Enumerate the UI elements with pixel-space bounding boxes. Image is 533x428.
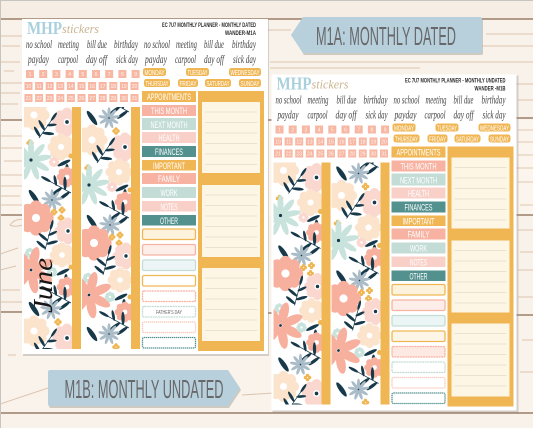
date stickers: 9 — [384, 128, 387, 134]
weekday stickers: THURSDAY — [395, 136, 418, 144]
script word stickers: day off — [454, 110, 475, 122]
date stickers: 30 — [121, 96, 127, 102]
panel: sticker sheet M1B undated — [251, 74, 518, 416]
date stickers: 1 — [278, 128, 281, 134]
date stickers: 10 — [26, 84, 31, 90]
weekday stickers: WEDNESDAY — [230, 70, 260, 77]
script word stickers: no school — [26, 39, 52, 51]
category labels: WORK — [160, 188, 178, 199]
category labels: IMPORTANT — [153, 161, 185, 172]
sheet title: EC 7U7 MONTHLY PLANNER - MONTHLY DATED — [162, 23, 256, 29]
script word stickers: carpool — [175, 54, 196, 66]
script word stickers: no school — [276, 94, 302, 106]
date stickers: 2 — [42, 72, 45, 78]
date stickers — [24, 70, 140, 102]
category labels — [142, 91, 196, 227]
script word stickers — [276, 94, 506, 122]
date stickers: 29 — [360, 152, 366, 158]
script word stickers: sick day — [366, 110, 388, 122]
logo: MHP — [27, 18, 62, 38]
script word stickers: meeting — [426, 94, 447, 106]
date stickers — [274, 126, 389, 158]
date stickers: 27 — [89, 96, 95, 102]
date stickers: 10 — [275, 140, 281, 146]
date stickers: 1 — [29, 72, 32, 78]
date stickers: 24 — [58, 96, 63, 102]
lined note panels — [198, 91, 264, 351]
script word stickers: meeting — [176, 39, 197, 51]
date stickers: 21 — [26, 96, 31, 102]
script word stickers: birthday — [364, 94, 388, 106]
weekday stickers: WEDNESDAY — [480, 126, 509, 132]
script word stickers: sick day — [482, 110, 506, 122]
date stickers: 11 — [286, 140, 291, 146]
date stickers: 6 — [95, 72, 98, 78]
script word stickers: sick day — [233, 54, 257, 66]
script word stickers: carpool — [308, 110, 328, 122]
date stickers: 20 — [381, 140, 387, 146]
script word stickers: payday — [144, 54, 168, 66]
date stickers: 3 — [305, 128, 308, 134]
date stickers: 17 — [349, 140, 355, 146]
date stickers: 15 — [79, 84, 84, 90]
date stickers: 24 — [307, 152, 313, 158]
date stickers: 25 — [68, 96, 74, 102]
date stickers: 28 — [349, 152, 355, 158]
category labels: NOTES — [160, 202, 178, 213]
banner: M1B monthly undated — [48, 370, 241, 408]
date stickers: 26 — [79, 96, 84, 102]
date stickers: 8 — [371, 128, 374, 134]
date stickers: 22 — [36, 96, 42, 102]
date stickers: 19 — [121, 84, 127, 90]
script word stickers: no school — [394, 94, 420, 106]
weekday stickers — [143, 68, 261, 88]
weekday stickers: SATURDAY — [456, 136, 479, 144]
category labels: THIS MONTH — [151, 106, 187, 117]
date stickers: 27 — [339, 152, 345, 158]
june script label: June — [28, 258, 58, 313]
outlined box stickers: FATHER'S DAY — [156, 310, 182, 316]
date stickers: 28 — [100, 96, 106, 102]
date stickers: 25 — [318, 152, 323, 158]
category labels: THIS MONTH — [400, 162, 437, 172]
date stickers: 22 — [286, 152, 292, 158]
weekday stickers: THURSDAY — [146, 81, 169, 88]
date stickers: 4 — [68, 72, 71, 78]
date stickers: 31 — [381, 152, 387, 158]
date stickers: 21 — [275, 152, 281, 158]
category labels: FAMILY — [158, 174, 180, 185]
script word stickers — [26, 39, 257, 66]
floral washi strips — [251, 140, 390, 416]
category labels: NEXT MONTH — [150, 120, 188, 131]
floral washi strips — [2, 85, 140, 360]
date stickers: 7 — [108, 72, 111, 78]
category labels: WORK — [410, 244, 427, 254]
category labels: FINANCES — [404, 202, 432, 214]
date stickers: 5 — [81, 72, 84, 78]
date stickers: 20 — [132, 84, 137, 90]
script word stickers: meeting — [58, 39, 79, 51]
outlined box stickers — [392, 284, 445, 404]
date stickers: 16 — [89, 84, 95, 90]
script word stickers: bill due — [204, 39, 224, 51]
date stickers: 26 — [328, 152, 334, 158]
outlined box stickers — [142, 229, 196, 348]
category labels: APPOINTMENTS — [147, 92, 191, 103]
date stickers: 8 — [121, 72, 124, 78]
category labels: OTHER — [410, 272, 428, 282]
script word stickers: carpool — [424, 110, 446, 122]
date stickers: 12 — [47, 84, 53, 90]
script word stickers: birthday — [482, 94, 506, 106]
weekday stickers: MONDAY — [394, 126, 414, 132]
category labels: NEXT MONTH — [400, 176, 437, 186]
date stickers: 15 — [328, 140, 334, 146]
logo: MHP — [276, 74, 312, 94]
script word stickers: meeting — [308, 94, 329, 106]
category labels: IMPORTANT — [402, 216, 435, 228]
category labels: HEALTH — [408, 188, 429, 200]
script word stickers: bill due — [87, 39, 107, 51]
script word stickers: sick day — [116, 54, 139, 66]
category labels: NOTES — [410, 258, 427, 268]
date stickers: 7 — [357, 128, 360, 134]
banner: M1B monthly undated: M1B: MONTHLY UNDATED — [64, 374, 224, 404]
category labels: APPOINTMENTS — [396, 148, 440, 158]
sheet title — [162, 23, 256, 37]
script word stickers: birthday — [232, 39, 257, 51]
logo — [276, 74, 348, 94]
weekday stickers: SATURDAY — [206, 81, 230, 88]
date stickers: 17 — [100, 84, 106, 90]
weekday stickers: TUESDAY — [437, 126, 457, 132]
category labels: HEALTH — [158, 133, 180, 144]
date stickers: 30 — [371, 152, 376, 158]
category labels: FINANCES — [155, 147, 183, 158]
script word stickers: bill due — [336, 94, 356, 106]
date stickers: 14 — [68, 84, 74, 90]
banner: M1A monthly dated — [291, 17, 483, 55]
sheet title — [405, 78, 506, 92]
date stickers: 14 — [318, 140, 323, 146]
date stickers: 4 — [318, 128, 321, 134]
date stickers: 13 — [307, 140, 313, 146]
panel: sticker sheet M1A dated — [2, 18, 269, 360]
date stickers: 5 — [331, 128, 334, 134]
date stickers: 18 — [111, 84, 116, 90]
date stickers: 2 — [291, 128, 294, 134]
weekday stickers — [392, 124, 510, 144]
date stickers: 13 — [58, 84, 63, 90]
weekday stickers: MONDAY — [144, 70, 165, 77]
date stickers: 12 — [296, 140, 302, 146]
script word stickers: payday — [277, 110, 299, 122]
sheet title: WANDER -M1B — [474, 86, 506, 92]
script word stickers: day off — [336, 110, 358, 122]
category labels: OTHER — [160, 216, 178, 227]
logo: stickers — [312, 76, 348, 92]
script word stickers: carpool — [58, 54, 78, 66]
category labels: FAMILY — [408, 230, 430, 240]
weekday stickers: FRIDAY — [429, 136, 446, 144]
date stickers: 31 — [132, 96, 137, 102]
weekday stickers: FRIDAY — [180, 81, 197, 88]
weekday stickers: SUNDAY — [490, 136, 509, 144]
date stickers: 11 — [36, 84, 42, 90]
date stickers: 6 — [344, 128, 347, 134]
script word stickers: day off — [204, 54, 225, 66]
date stickers: 23 — [296, 152, 302, 158]
lined note panels — [448, 146, 514, 406]
date stickers: 9 — [134, 72, 137, 78]
script word stickers: payday — [27, 54, 50, 66]
date stickers: 23 — [47, 96, 53, 102]
date stickers: 3 — [55, 72, 58, 78]
script word stickers: birthday — [114, 39, 139, 51]
script word stickers: day off — [86, 54, 108, 66]
date stickers: 18 — [360, 140, 366, 146]
script word stickers: no school — [144, 39, 170, 51]
script word stickers: payday — [394, 110, 417, 122]
script word stickers: bill due — [454, 94, 474, 106]
date stickers: 16 — [339, 140, 345, 146]
weekday stickers: TUESDAY — [188, 70, 208, 77]
sheet title: WANDER-M1A — [225, 31, 256, 37]
category labels — [392, 146, 446, 282]
logo — [27, 18, 99, 38]
weekday stickers: SUNDAY — [240, 81, 260, 88]
logo: stickers — [62, 21, 99, 36]
date stickers: 19 — [371, 140, 376, 146]
date stickers: 29 — [111, 96, 116, 102]
